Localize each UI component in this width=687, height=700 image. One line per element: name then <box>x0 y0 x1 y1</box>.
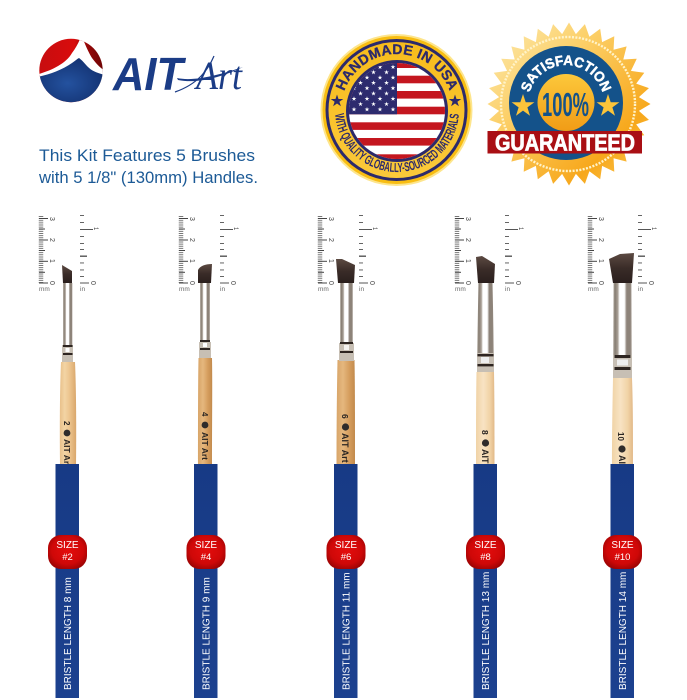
ruler: brush 2: 1 <box>188 259 195 263</box>
ruler: brush 2: in <box>220 286 225 293</box>
size column: brush 10 <box>603 464 642 698</box>
size badge <box>466 535 505 569</box>
badge stars <box>331 94 461 106</box>
ruler: brush 4: 1 <box>464 259 471 263</box>
ruler: brush 3: mm <box>318 286 329 293</box>
ruler: brush 3: 1 <box>327 259 334 263</box>
ruler: brush 5: 0 <box>647 281 654 285</box>
ruler: brush 3: 3 <box>327 217 334 221</box>
blue disc <box>509 46 623 160</box>
starburst <box>485 20 653 188</box>
ruler: brush 2: 3 <box>188 217 195 221</box>
size badge: #8 <box>480 552 491 563</box>
size column: brush 4 <box>186 464 226 698</box>
ruler: brush 2: 2 <box>188 238 195 242</box>
ruler: brush 3 <box>318 215 377 293</box>
brush: size 2 <box>60 265 76 467</box>
size badge: SIZE <box>335 540 357 551</box>
ruler: brush 1: 1 <box>48 259 55 263</box>
brush: size 6 <box>336 259 355 466</box>
ruler: brush 5 <box>588 215 656 293</box>
brush: size 4: 4 <box>200 412 209 417</box>
ruler: brush 3: 0 <box>368 281 375 285</box>
size badge: #10 <box>615 552 630 563</box>
ruler: brush 4: mm <box>455 286 466 293</box>
size column: brush 6 <box>326 464 366 698</box>
bristle length label: BRISTLE LENGTH 14 mm <box>618 572 629 690</box>
ruler: brush 4: 0 <box>464 281 471 285</box>
ruler: brush 5: 1 <box>650 227 656 231</box>
brush: size 4 <box>198 264 212 466</box>
ruler: brush 2 <box>179 215 238 293</box>
ruler: brush 5: in <box>638 286 643 293</box>
logo wordmark Art <box>175 53 243 98</box>
gold centre <box>538 74 594 131</box>
brush: size 8 <box>476 256 495 479</box>
ruler: brush 5: 3 <box>597 217 604 221</box>
size column: brush 8 <box>466 464 505 698</box>
logo wordmark Art: Art <box>193 53 243 98</box>
brush: size 2: 2 <box>62 421 71 426</box>
ruler: brush 2: mm <box>179 286 190 293</box>
100 percent: 100% <box>542 86 589 123</box>
ruler: brush 1: 1 <box>92 227 98 231</box>
ruler: brush 4: 1 <box>517 227 523 231</box>
brush: size 6: 6 <box>340 414 350 419</box>
ruler: brush 1 <box>39 215 98 293</box>
ruler: brush 4: in <box>505 286 510 293</box>
size badge: SIZE <box>195 540 217 551</box>
bristle length label: BRISTLE LENGTH 8 mm <box>63 577 74 690</box>
ruler: brush 1: 0 <box>89 281 96 285</box>
icon: logo globe <box>37 38 105 104</box>
text block: kit description: This Kit Features 5 Brushes <box>39 146 255 165</box>
ruler: brush 4: 2 <box>464 238 471 242</box>
bristle length label: BRISTLE LENGTH 9 mm <box>202 577 212 690</box>
brush: size 2: AIT Art <box>62 439 72 467</box>
ruler: brush 1: 0 <box>48 281 55 285</box>
ruler: brush 2: 0 <box>229 281 236 285</box>
brush: size 10: 10 <box>616 432 625 441</box>
size badge: #6 <box>341 552 351 563</box>
ruler: brush 1: 2 <box>48 238 55 242</box>
brush: size 8: 8 <box>480 430 490 435</box>
ruler: brush 2: 1 <box>232 227 238 231</box>
bristle length label: BRISTLE LENGTH 11 mm <box>342 572 352 690</box>
size badge <box>48 535 87 569</box>
size badge: SIZE <box>474 540 497 551</box>
badge subheading: WITH QUALITY GLOBALLY-SOURCED MATERIALS <box>335 113 459 172</box>
size badge: SIZE <box>611 540 634 551</box>
ruler: brush 4: 3 <box>464 217 471 221</box>
brush: size 8: AIT Art <box>480 449 490 479</box>
size badge <box>326 535 366 569</box>
stars <box>512 94 619 116</box>
badge heading: HANDMADE IN USA <box>336 44 458 91</box>
ruler: brush 1: mm <box>39 286 50 293</box>
size badge <box>186 535 226 569</box>
logo: AIT Art <box>37 38 243 104</box>
satisfaction arc text: SATISFACTION <box>521 55 612 92</box>
size badge: SIZE <box>56 540 79 551</box>
brush: size 10 <box>609 253 634 485</box>
ruler: brush 5: 1 <box>597 259 604 263</box>
ruler: brush 5: 2 <box>597 238 604 242</box>
brush: size 6: AIT Art <box>340 433 350 463</box>
bristle length label: BRISTLE LENGTH 13 mm <box>481 572 492 690</box>
ruler: brush 4 <box>455 215 523 293</box>
brush: size 10: AIT Art <box>617 455 627 485</box>
brush: size 4: AIT Art <box>200 432 210 460</box>
ruler: brush 2: 0 <box>188 281 195 285</box>
text block: kit description <box>38 146 258 187</box>
ruler: brush 3: in <box>359 286 364 293</box>
ruler: brush 1: in <box>80 286 85 293</box>
dotted ring <box>501 37 635 171</box>
ruler: brush 3: 0 <box>327 281 334 285</box>
ruler: brush 5: 0 <box>597 281 604 285</box>
ruler: brush 1: 3 <box>48 217 55 221</box>
american flag <box>349 60 445 160</box>
logo wordmark AIT: AIT <box>112 48 187 100</box>
size column: brush 2 <box>48 464 87 698</box>
size badge: #4 <box>201 552 211 563</box>
ruler: brush 4: 0 <box>514 281 521 285</box>
ruler: brush 5: mm <box>588 286 599 293</box>
guaranteed banner: GUARANTEED <box>495 130 635 156</box>
badge: satisfaction guaranteed <box>488 22 650 186</box>
text block: kit description: with 5 1/8" (130mm) Handles. <box>38 168 258 187</box>
badge: handmade in USA <box>320 34 472 186</box>
size badge: #2 <box>62 552 73 563</box>
ruler: brush 3: 1 <box>371 227 377 231</box>
ruler: brush 3: 2 <box>327 238 334 242</box>
size badge <box>603 535 642 569</box>
